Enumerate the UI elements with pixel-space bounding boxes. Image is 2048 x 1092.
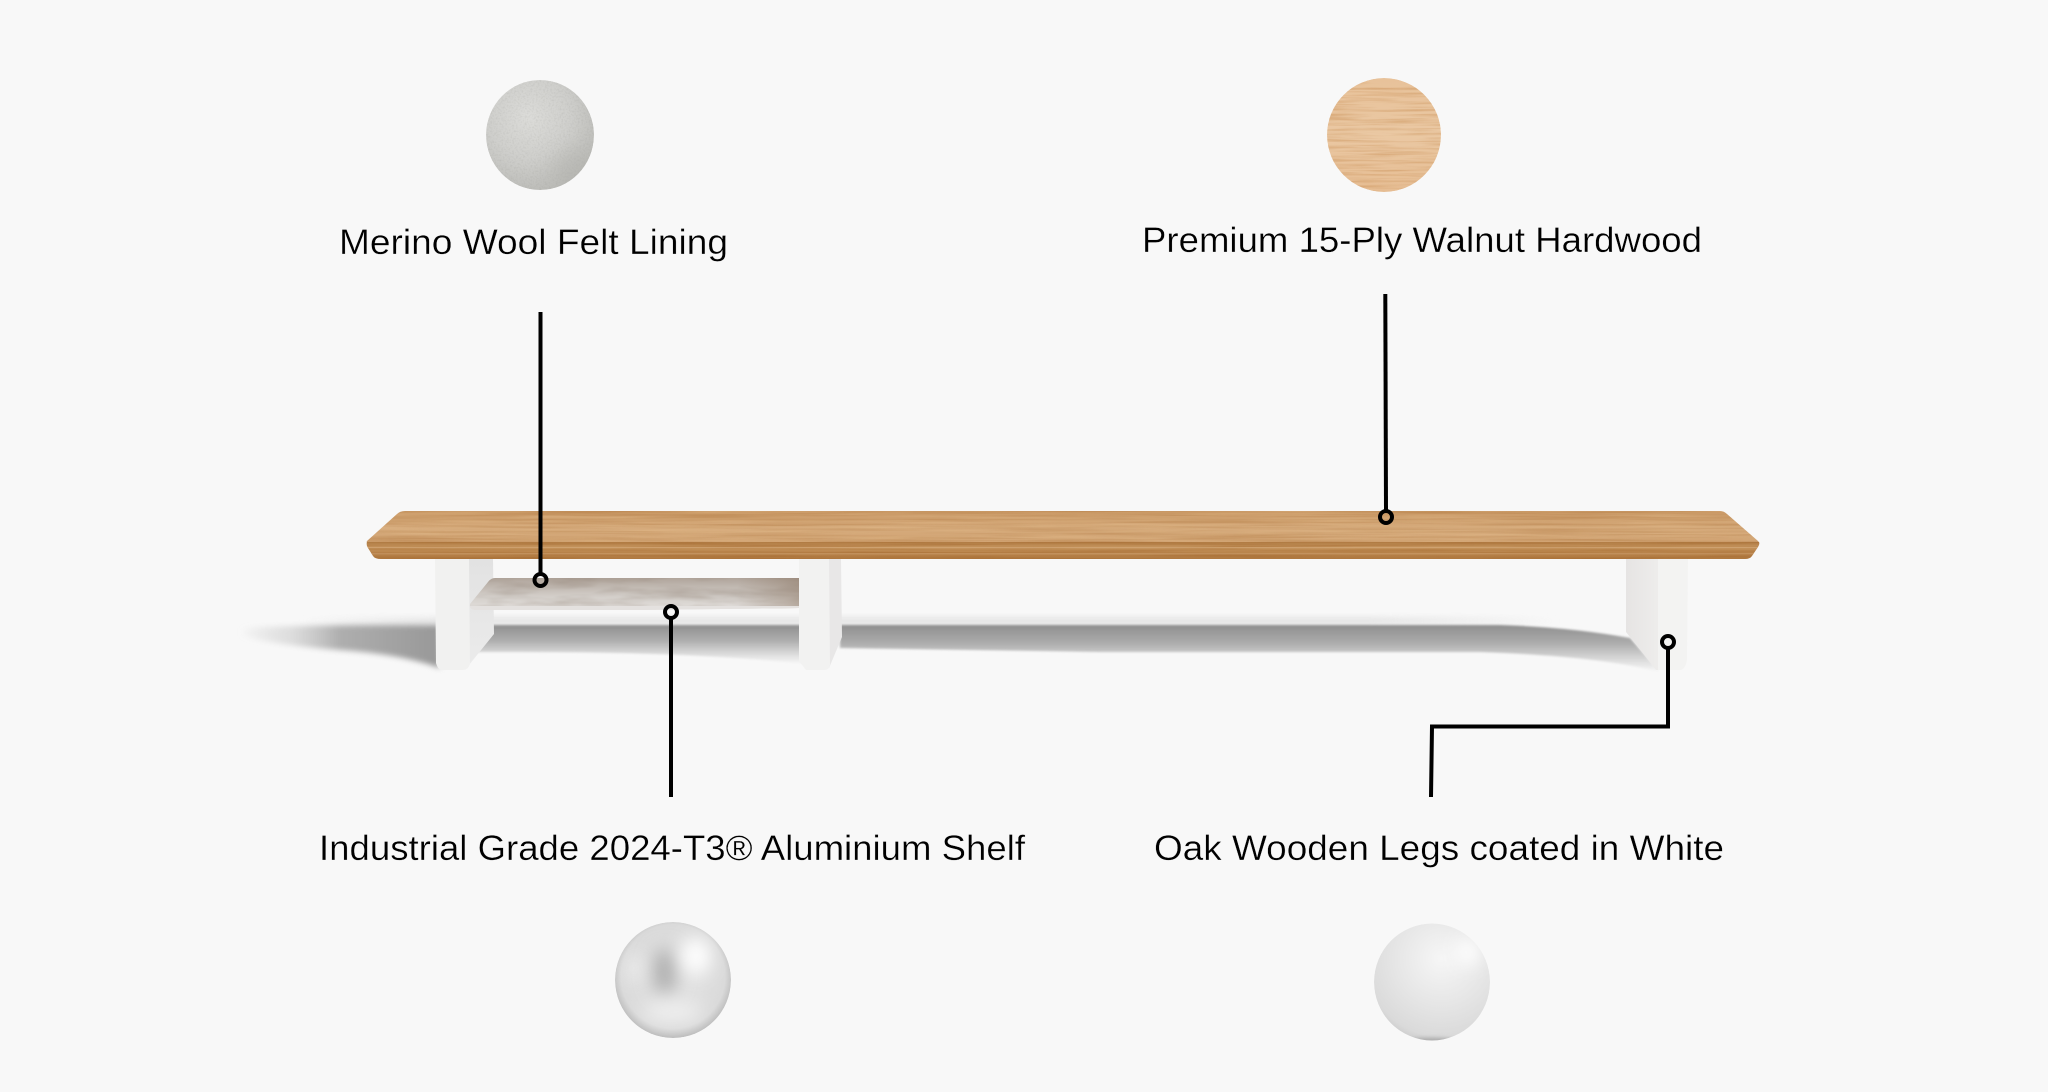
wooden top plank: [360, 510, 1765, 560]
floor shadow: [240, 617, 1660, 672]
callout line: legs: [1431, 636, 1674, 797]
label: oak legs: Oak Wooden Legs coated in White: [1154, 829, 1724, 868]
callout line: wool: [534, 312, 546, 586]
callout line: walnut: [1380, 294, 1392, 523]
left leg: [435, 559, 494, 670]
far right leg: [1626, 559, 1688, 670]
right leg: [799, 559, 842, 670]
aluminium shelf with felt: [470, 578, 799, 610]
callout line: shelf: [665, 606, 677, 797]
stand: [360, 510, 1765, 670]
label: walnut: Premium 15-Ply Walnut Hardwood: [1142, 221, 1702, 260]
label: aluminium: Industrial Grade 2024-T3® Aluminium Shelf: [319, 829, 1025, 868]
label: wool: Merino Wool Felt Lining: [339, 223, 728, 262]
icon: white ball: [1374, 924, 1490, 1046]
icon: wool felt ball: [485, 79, 599, 191]
icon: wood ball: [1327, 78, 1441, 192]
icon: aluminium ball: [615, 922, 731, 1038]
